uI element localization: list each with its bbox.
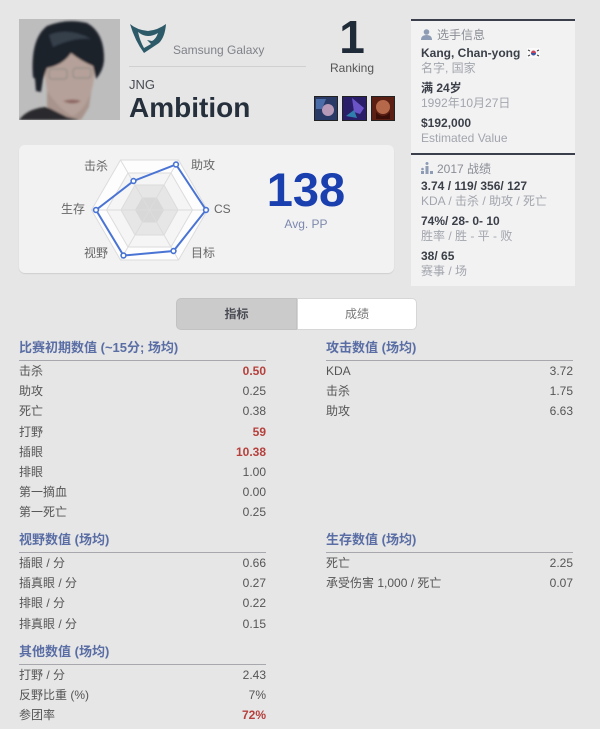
section: early game stats: 打野 [19,425,43,439]
section: early game stats: 第一摘血 [19,485,67,499]
panel: player info: 胜率 / 胜 - 平 - 败 [421,229,512,243]
section: attack stats: KDA [326,364,351,378]
radar chart: 助攻 [191,158,215,172]
icon: rank podium [421,162,433,174]
section: attack stats: 击杀 [326,384,350,398]
section: vision stats: 0.15 [243,617,266,631]
radar chart: CS [214,202,231,216]
section: other stats: 打野 / 分 [19,668,65,682]
section: early game stats: 0.38 [243,404,266,418]
section: survival stats: 死亡 [326,556,350,570]
section: vision stats: 排眼 / 分 [19,596,65,610]
section: early game stats: 10.38 [236,445,266,459]
icon: person [421,29,432,40]
section: other stats: 7% [249,688,266,702]
radar chart: 目标 [191,246,215,260]
section: survival stats: 承受伤害 1,000 / 死亡 [326,576,441,590]
section: early game stats: 排眼 [19,465,43,479]
player name: Ambition [129,92,250,123]
section: early game stats [19,340,266,519]
tab: results: 成绩 [345,307,369,321]
section: attack stats: 3.72 [550,364,573,378]
radar chart [61,158,231,260]
tab: metrics (active) [176,298,297,330]
section: vision stats: 插真眼 / 分 [19,576,77,590]
section: early game stats: 助攻 [19,384,43,398]
panel: player info: 满 24岁 [421,81,462,95]
panel: player info: 38/ 65 [421,249,454,263]
section: other stats: 参团率 [19,708,55,722]
section: early game stats: 1.00 [243,465,266,479]
data polygon [94,162,208,258]
section: early game stats: 插眼 [19,445,43,459]
section: survival stats: 生存数值 (场均) [326,532,416,547]
section: vision stats: 0.66 [243,556,266,570]
radar chart: 击杀 [84,158,108,173]
section: survival stats [326,532,573,590]
section: early game stats: 0.25 [243,384,266,398]
section: early game stats: 死亡 [19,404,43,418]
section: early game stats: 59 [253,425,266,439]
radar chart: 生存 [61,202,85,216]
section: attack stats: 攻击数值 (场均) [326,340,416,355]
section: other stats: 72% [242,708,266,722]
panel: player info: Estimated Value [421,131,508,145]
section: early game stats: 比赛初期数值 (~15分; 场均) [19,340,178,355]
section: attack stats: 6.63 [550,404,573,418]
section: attack stats: 1.75 [550,384,573,398]
section: vision stats: 视野数值 (场均) [19,532,109,547]
panel: player info [411,19,575,286]
section: vision stats: 插眼 / 分 [19,556,65,570]
radar chart: 视野 [84,245,108,260]
champion icons [314,96,395,121]
section: other stats: 2.43 [243,668,266,682]
section: early game stats: 击杀 [19,364,43,378]
section: early game stats: 0.50 [243,364,266,378]
ranking number: 1 [339,11,365,63]
tab: metrics (active): 指标 [224,307,248,321]
player position: JNG [129,77,155,92]
panel: player info: $192,000 [421,116,471,130]
section: attack stats: 助攻 [326,404,350,418]
section: other stats: 反野比重 (%) [19,688,89,702]
panel: player info: 赛事 / 场 [421,264,467,278]
panel: player info: 1992年10月27日 [421,96,510,110]
player portrait [19,19,120,120]
panel: radar and average PP [19,145,394,273]
section: vision stats: 排真眼 / 分 [19,617,77,631]
ranking label: Ranking [330,61,374,75]
section: early game stats: 0.25 [243,505,266,519]
panel: player info: 2017 战绩 [437,162,491,176]
panel: player info: 名字, 国家 [421,61,476,75]
section: attack stats [326,340,573,418]
section: vision stats: 0.27 [243,576,266,590]
section: survival stats: 0.07 [550,576,573,590]
panel: player info: KDA / 击杀 / 助攻 / 死亡 [421,194,547,208]
panel: player info: 选手信息 [437,28,485,42]
team logo [130,24,166,53]
section: survival stats: 2.25 [550,556,573,570]
section: other stats: 其他数值 (场均) [19,644,109,659]
icon: Korean flag [528,50,540,56]
average PP value: 138 [267,163,345,216]
section: vision stats: 0.22 [243,596,266,610]
section: early game stats: 0.00 [243,485,266,499]
panel: player info: 74%/ 28- 0- 10 [421,214,500,228]
panel: player info: Kang, Chan-yong [421,46,520,60]
tab: results [297,298,417,330]
section: other stats [19,644,266,722]
average PP label: Avg. PP [284,217,328,231]
section: vision stats [19,532,266,631]
team name: Samsung Galaxy [173,43,264,57]
panel: player info: 3.74 / 119/ 356/ 127 [421,179,527,193]
section: early game stats: 第一死亡 [19,505,67,519]
